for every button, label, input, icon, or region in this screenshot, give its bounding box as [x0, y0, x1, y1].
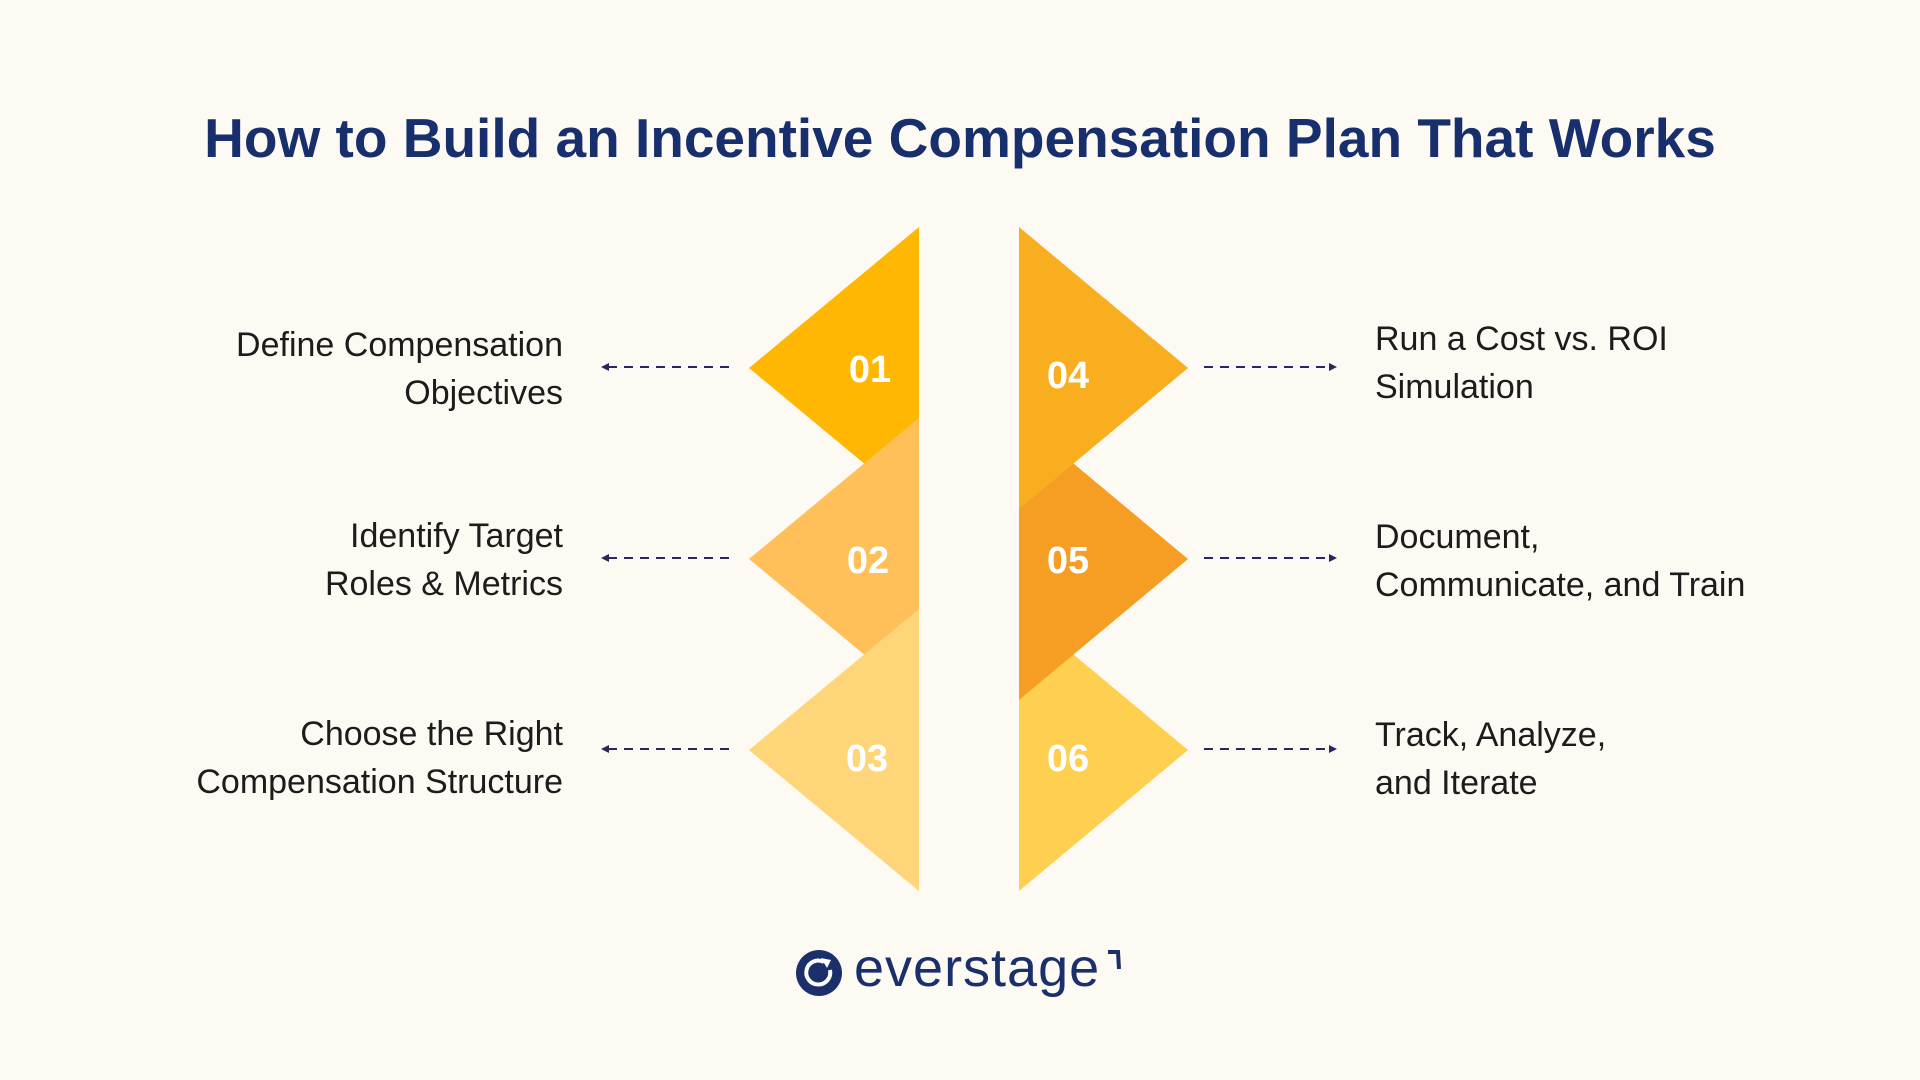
numbers: 01	[849, 349, 891, 391]
text: step 4: Run a Cost vs. ROI	[1375, 320, 1668, 358]
text: step 5: Communicate, and Train	[1375, 566, 1745, 604]
text: step 6	[1375, 716, 1606, 802]
text: step 6: and Iterate	[1375, 764, 1538, 802]
text: step 6: Track, Analyze,	[1375, 716, 1606, 754]
numbers: 05	[1047, 540, 1089, 582]
right triangles	[1019, 227, 1188, 891]
numbers: 02	[847, 540, 889, 582]
numbers	[846, 349, 1089, 780]
text: step 4	[1375, 320, 1668, 406]
text: step 1: Objectives	[404, 374, 563, 412]
text: step 4: Simulation	[1375, 368, 1534, 406]
left triangles	[749, 227, 919, 891]
text: step 2: Identify Target	[350, 517, 563, 555]
logo: everstage	[854, 938, 1100, 998]
text: step 1	[236, 326, 563, 412]
text: step 3: Compensation Structure	[196, 763, 563, 801]
text: step 5	[1375, 518, 1745, 604]
text: step 3: Choose the Right	[300, 715, 563, 753]
text: step 2	[325, 517, 563, 603]
numbers: 03	[846, 738, 888, 780]
text: step 2: Roles & Metrics	[325, 565, 563, 603]
title: How to Build an Incentive Compensation Plan That Works	[204, 107, 1716, 169]
arrows	[601, 363, 1337, 753]
numbers: 06	[1047, 738, 1089, 780]
text: step 1: Define Compensation	[236, 326, 563, 364]
text: step 5: Document,	[1375, 518, 1539, 556]
numbers: 04	[1047, 355, 1089, 397]
text: step 3	[196, 715, 563, 801]
